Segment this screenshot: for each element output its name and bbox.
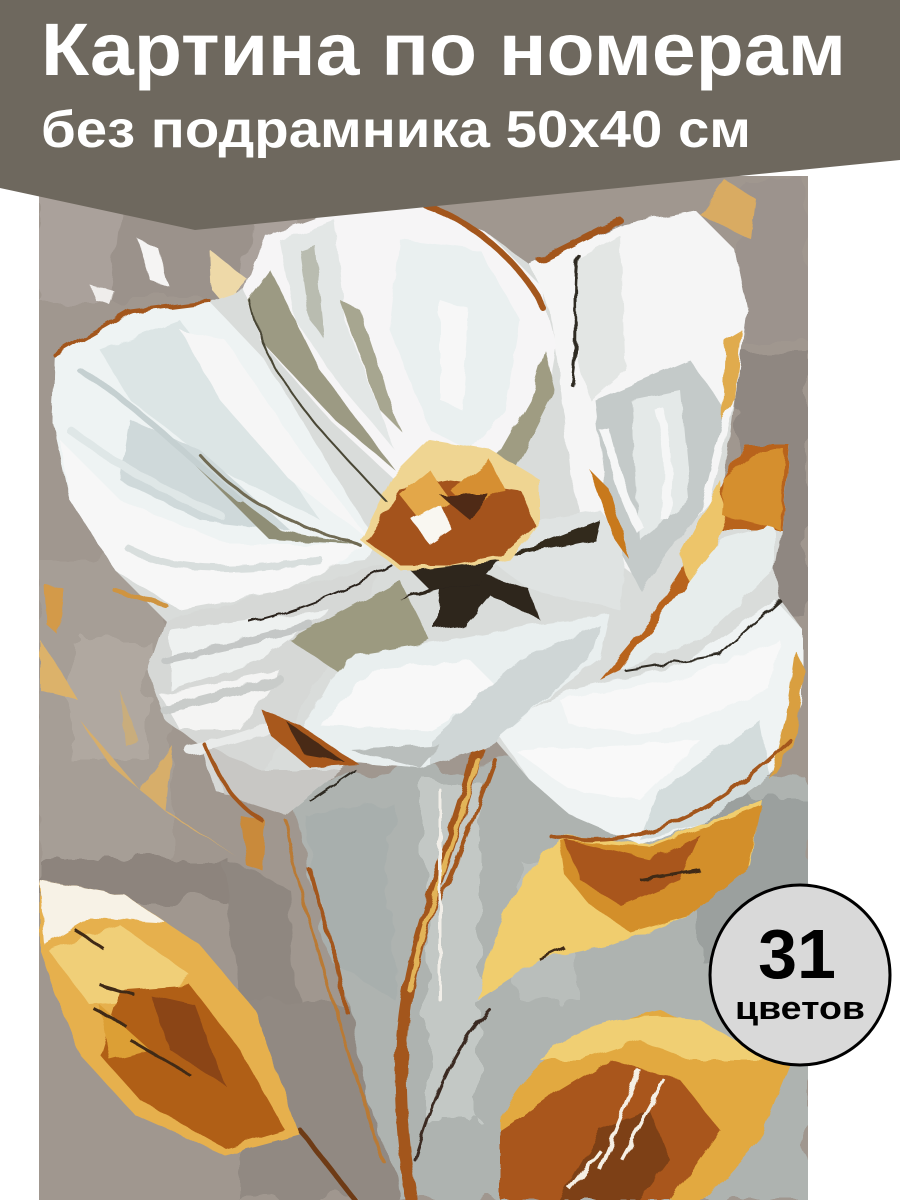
badge: 31 colours: 31: [758, 915, 836, 993]
petal: lower right: [495, 600, 805, 845]
leaf: bottom right: [500, 1010, 790, 1200]
flower center: [360, 440, 540, 630]
stem: [285, 745, 495, 1200]
painting background: [39, 176, 808, 1200]
flower: [52, 205, 805, 845]
petal outlines: [55, 205, 790, 840]
petal: upper left: [52, 302, 375, 610]
petal: upper right: [530, 210, 747, 590]
banner: [0, 0, 900, 230]
subtitle: без подрамника 50х40 см: [41, 101, 751, 159]
petal: inner right: [514, 510, 625, 568]
title: Картина по номерам: [41, 8, 846, 91]
petal: top center: [245, 205, 556, 480]
leaf: lower left: [40, 880, 300, 1155]
petal: front fold: [262, 615, 610, 768]
flower silhouette base: [52, 205, 803, 845]
background paint splashes: [40, 180, 757, 870]
petal: lower left: [148, 565, 430, 815]
painting: white flower with golden leaves: [39, 176, 808, 1200]
badge: 31 colours: цветов: [735, 990, 865, 1026]
leaf: right gold: [478, 800, 762, 1000]
badge: 31 colours: [710, 885, 890, 1065]
gold accent on right petal: [600, 445, 790, 680]
